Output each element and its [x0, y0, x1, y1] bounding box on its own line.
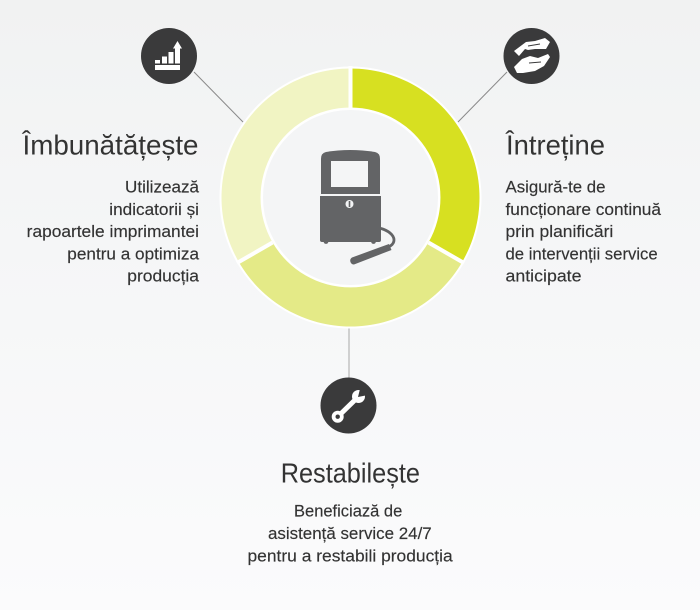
heading: Întreține: Întreține — [505, 130, 605, 160]
text: Îmbunătățește body: producția — [127, 268, 200, 286]
text: Întreține body — [506, 178, 662, 286]
text: Îmbunătățește body — [27, 178, 200, 286]
donut chart — [220, 66, 482, 328]
text: Restabilește body: asistență service 24/7 — [268, 525, 432, 543]
text: Întreține body: prin planificări — [506, 223, 613, 241]
text: Întreține body: funcționare continuă — [506, 201, 662, 219]
text: Restabilește body: Beneficiază de — [294, 503, 402, 521]
text: Restabilește body — [248, 503, 454, 566]
icon: hands — [504, 28, 560, 84]
segment: Îmbunătățește — [222, 68, 350, 262]
heading: Îmbunătățește: Îmbunătățește — [22, 130, 198, 160]
text: Restabilește body: pentru a restabili producția — [248, 548, 454, 566]
segment: Restabilește — [239, 242, 462, 326]
text: Îmbunătățește body: rapoartele imprimantei — [27, 223, 199, 241]
segment: Întreține — [350, 68, 479, 262]
icon: wrench — [320, 378, 376, 434]
text: Îmbunătățește body: pentru a optimiza — [67, 245, 200, 263]
text: Îmbunătățește body: Utilizează — [125, 178, 200, 196]
text: Întreține body: Asigură-te de — [506, 178, 606, 196]
icon: improve chart — [141, 28, 197, 84]
heading: Restabilește: Restabilește — [281, 457, 420, 488]
icon: printer — [320, 150, 394, 264]
text: Întreține body: anticipate — [506, 268, 582, 286]
text: Îmbunătățește body: indicatorii și — [109, 201, 199, 219]
text: Întreține body: de intervenții service — [506, 245, 658, 263]
